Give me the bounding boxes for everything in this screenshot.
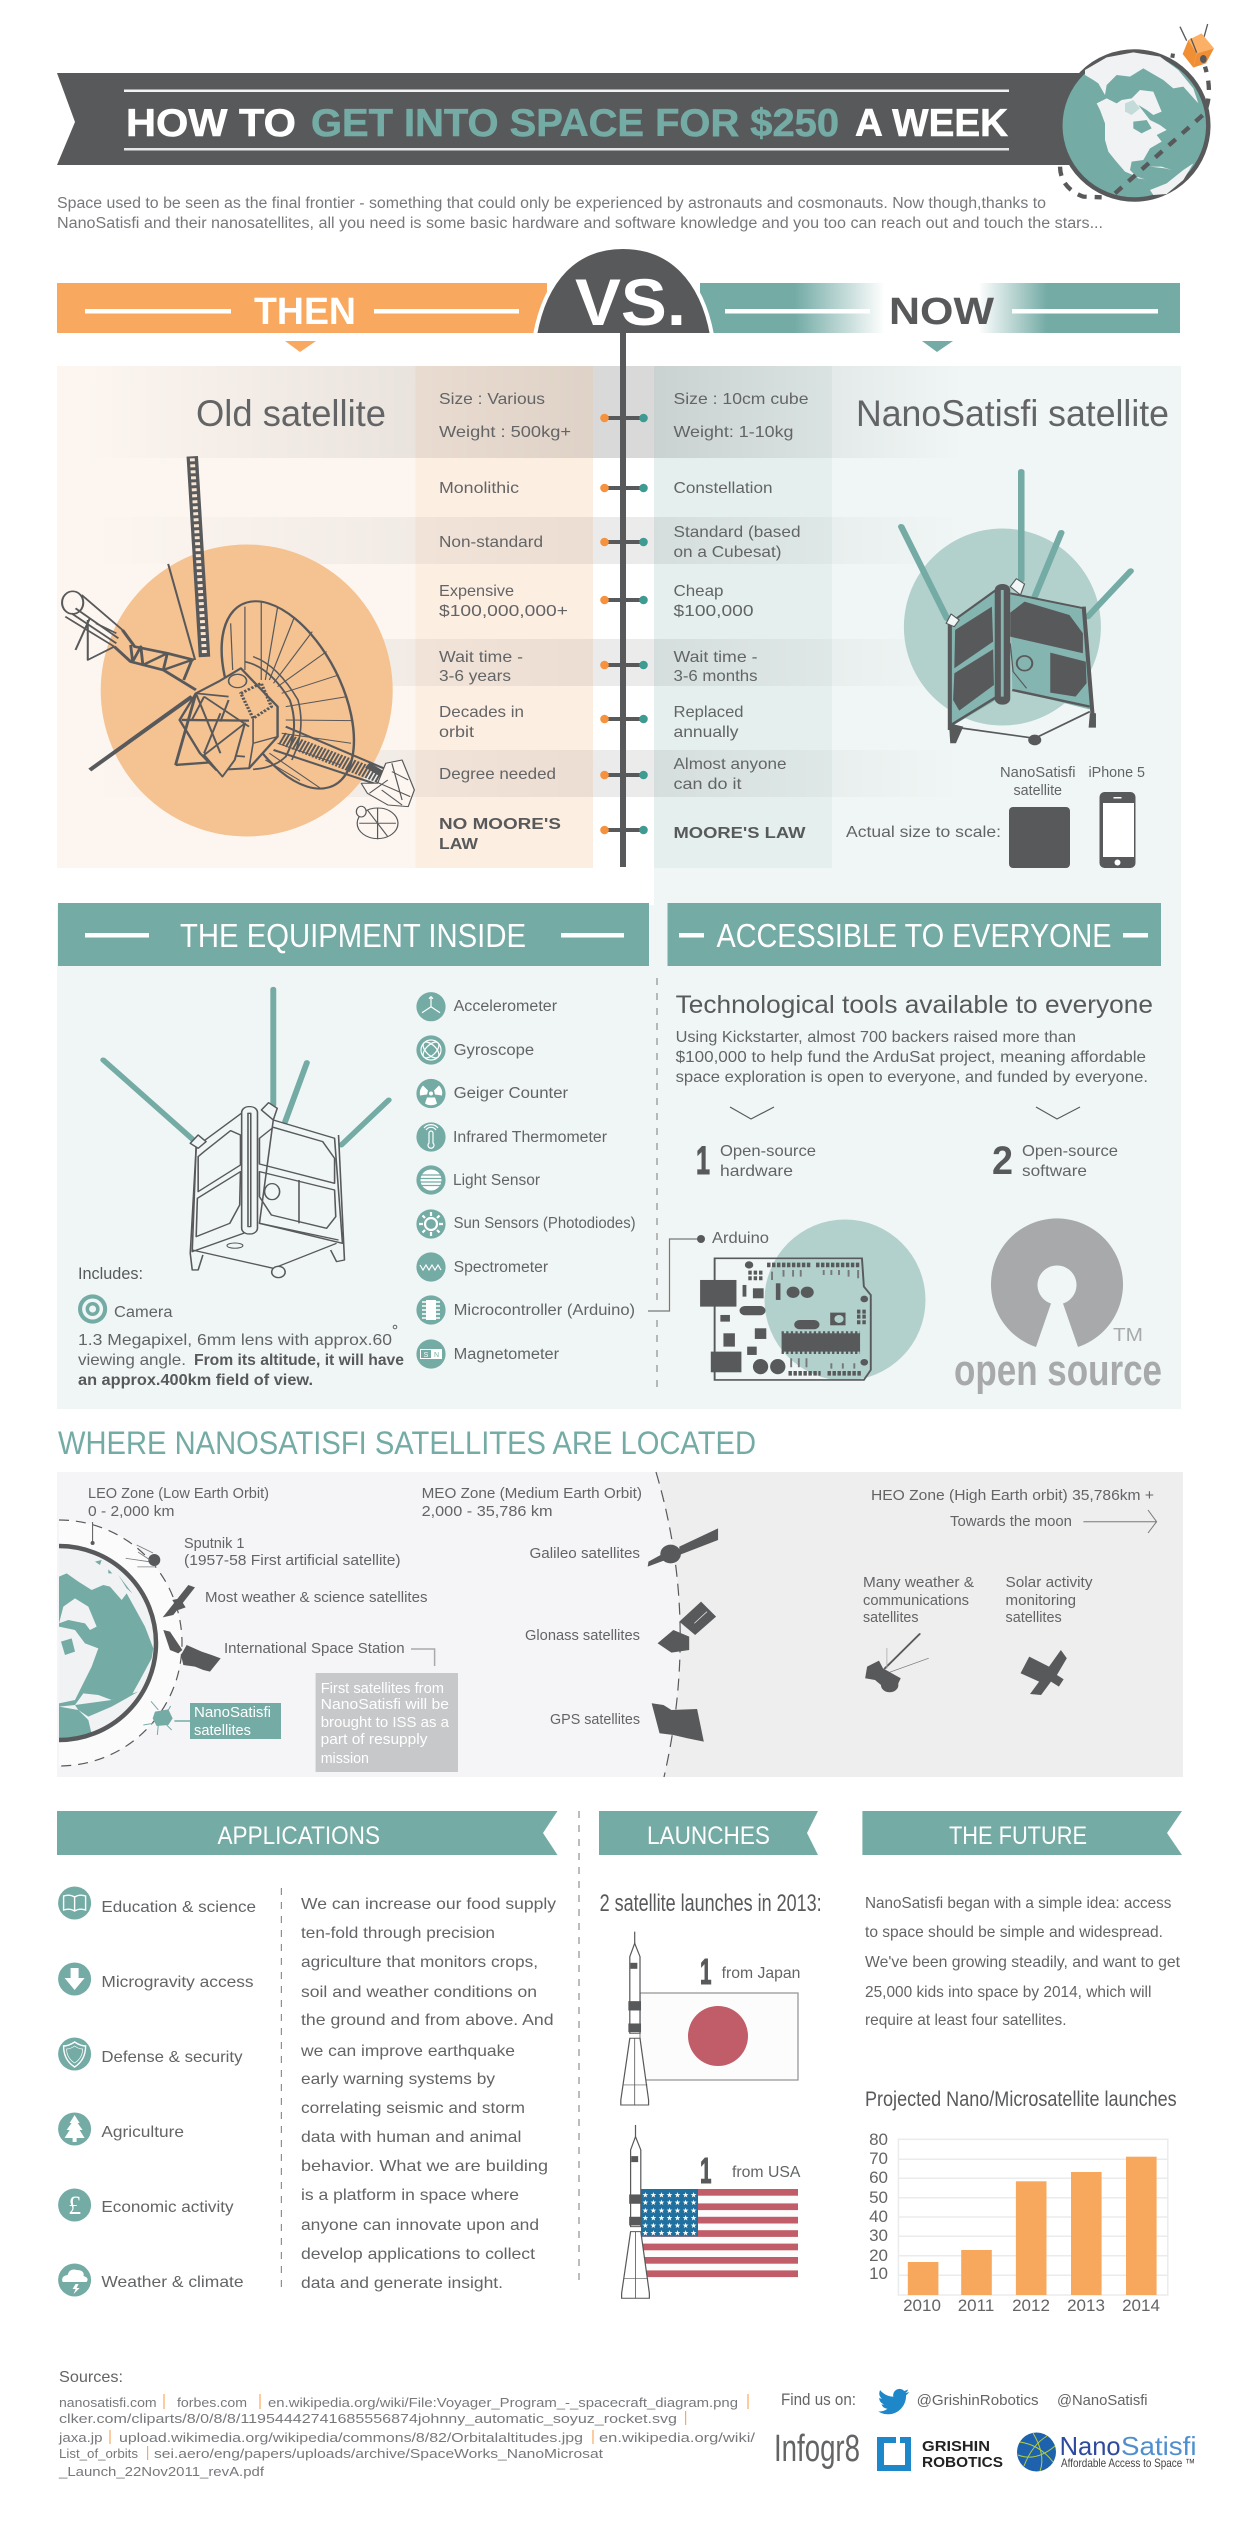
nanosatisfi satellites tag: [143, 1701, 281, 1739]
equipment list: Infrared Thermometer: [453, 1129, 607, 1146]
solar activity satellites: Solar activity: [1006, 1574, 1093, 1591]
icon: infrared thermometer: [416, 1122, 446, 1152]
accessible text block: $100,000 to help fund the ArduSat project, meaning affordable: [676, 1049, 1146, 1066]
panel: orbit zones: [57, 1472, 1183, 1777]
accessible text block: space exploration is open to everyone, and funded by everyone.: [676, 1069, 1148, 1086]
galileo satellites: [530, 1528, 718, 1567]
usa flag: ★★★★★★★: [642, 2190, 697, 2200]
many weather and communications satellites: communications: [863, 1592, 969, 1609]
nanosatisfi satellites tag: NanoSatisfi: [194, 1704, 271, 1721]
nanosatisfi attributes: MOORE'S LAW: [674, 825, 807, 842]
then header bar: [57, 283, 547, 352]
header: accessible to everyone: [668, 903, 1161, 966]
icon: spectrometer: [416, 1252, 446, 1282]
icon: sun sensors: [416, 1209, 446, 1239]
callout: first satellites: First satellites from: [321, 1680, 444, 1697]
bar chart: projected launches: 2012: [1012, 2296, 1050, 2315]
icon: magnetometer: [416, 1339, 446, 1369]
sources: List_of_orbits: [59, 2446, 139, 2461]
equipment list: Geiger Counter: [454, 1085, 568, 1102]
applications paragraph: early warning systems by: [301, 2071, 495, 2088]
international space station: International Space Station: [224, 1640, 405, 1657]
nanosatisfi attributes: Cheap: [674, 583, 724, 600]
bar chart: projected launches: 30: [869, 2226, 888, 2245]
header: accessible to everyone: ACCESSIBLE TO EVERYONE: [716, 917, 1112, 954]
heading: old satellite: Old satellite: [196, 393, 386, 434]
size comparison: Actual size to scale:: [846, 824, 1001, 841]
open-source software label: 2: [992, 1139, 1013, 1183]
logo: grishin robotics: ROBOTICS: [922, 2454, 1003, 2471]
nanosatisfi attributes: 3-6 months: [674, 668, 758, 685]
heading: nanosatisfi satellite: NanoSatisfi satellite: [856, 393, 1169, 434]
future paragraph: [865, 1895, 1181, 2029]
social links: @NanoSatisfi: [1057, 2392, 1148, 2409]
bar chart: projected launches: 80: [869, 2130, 888, 2149]
includes: camera text: [78, 1264, 404, 1389]
future paragraph: 25,000 kids into space by 2014, which will: [865, 1984, 1151, 2001]
bar chart: projected launches: [865, 2088, 1177, 2315]
illustration: arduino board: [700, 1220, 926, 1380]
vs dome: VS.: [575, 265, 686, 339]
open-source hardware label: 1: [696, 1139, 710, 1183]
arduino connector: [648, 1230, 769, 1311]
zone labels: HEO Zone (High Earth orbit) 35,786km +: [871, 1487, 1154, 1504]
applications paragraph: data with human and animal: [301, 2129, 521, 2146]
old satellite attributes: LAW: [439, 836, 479, 853]
open-source hardware label: Open-source: [720, 1143, 816, 1160]
future paragraph: We've been growing steadily, and want to get: [865, 1954, 1181, 1971]
old satellite attributes: Size : Various: [439, 391, 545, 408]
towards the moon arrow: [950, 1510, 1157, 1533]
zone labels: [88, 1485, 1154, 1520]
nanosatisfi satellites tag: satellites: [194, 1722, 251, 1739]
bar chart: projected launches: 20: [869, 2246, 888, 2265]
usa flag: ★★★★★★★: [642, 2228, 697, 2238]
applications paragraph: ten-fold through precision: [301, 1925, 495, 1942]
sputnik: [126, 1535, 401, 1569]
diagram: earth with orbit: [59, 1520, 182, 1766]
sources: upload.wikimedia.org/wikipedia/commons/8/82/Orbitalaltitudes.jpg: [119, 2430, 583, 2445]
icon: gyroscope: [416, 1035, 446, 1065]
icon: camera: [78, 1294, 107, 1324]
panel: now background: [654, 366, 1181, 906]
applications paragraph: anyone can innovate upon and: [301, 2217, 539, 2234]
logo: nanosatisfi: Satisfi: [1121, 2431, 1196, 2461]
nanosatisfi attributes: $100,000: [674, 603, 754, 620]
sputnik: Sputnik 1: [184, 1535, 244, 1552]
includes: camera text: Includes:: [78, 1264, 143, 1283]
equipment list: [416, 992, 636, 1369]
callout: first satellites: NanoSatisfi will be: [321, 1696, 449, 1713]
size comparison: iPhone 5: [1088, 765, 1145, 781]
future paragraph: NanoSatisfi began with a simple idea: access: [865, 1895, 1171, 1912]
accessible text block: Technological tools available to everyone: [676, 991, 1153, 1019]
future paragraph: require at least four satellites.: [865, 2012, 1066, 2029]
glonass satellites: Glonass satellites: [525, 1627, 640, 1644]
icon: rocket usa: [622, 2125, 649, 2298]
intro text: [57, 195, 1103, 232]
japan flag: from Japan: [722, 1965, 800, 1982]
solar activity satellites: [1006, 1574, 1093, 1695]
icon: globe with orbiting satellite: [1060, 24, 1214, 199]
vs dome: [535, 247, 712, 339]
icon: open source logo: open source: [954, 1346, 1162, 1395]
old satellite attributes: Weight : 500kg+: [439, 424, 571, 441]
social links: Find us on:: [781, 2390, 856, 2409]
applications paragraph: [300, 1896, 556, 2292]
nanosatisfi attributes: Standard (based: [674, 524, 800, 541]
old satellite attributes: $100,000,000+: [439, 603, 568, 620]
comparison row bands: [57, 366, 964, 797]
nanosatisfi attributes: Weight: 1-10kg: [674, 424, 794, 441]
old satellite attributes: [439, 391, 571, 853]
applications paragraph: behavior. What we are building: [301, 2158, 548, 2175]
intro text: NanoSatisfi and their nanosatellites, all you need is some basic hardware and software knowledge and you too can reach out and touch the stars...: [57, 215, 1103, 232]
icon: twitter bird: [878, 2389, 909, 2414]
nanosatisfi attributes: can do it: [674, 776, 742, 793]
old satellite attributes: Non-standard: [439, 534, 543, 551]
sources: jaxa.jp: [58, 2430, 102, 2445]
sources: en.wikipedia.org/wiki/File:Voyager_Program_-_spacecraft_diagram.png: [268, 2395, 738, 2410]
sources: nanosatisfi.com: [59, 2395, 157, 2410]
accessible text block: Using Kickstarter, almost 700 backers raised more than: [676, 1029, 1076, 1046]
towards the moon arrow: Towards the moon: [950, 1513, 1072, 1530]
header: the future: [862, 1811, 1182, 1855]
usa flag: 1: [700, 2150, 712, 2191]
bar chart: projected launches: 70: [869, 2149, 888, 2168]
gps satellites: GPS satellites: [550, 1711, 640, 1728]
applications list: Weather & climate: [101, 2274, 244, 2291]
usa flag: [641, 2150, 801, 2277]
comparison timeline: [600, 333, 648, 867]
icon: magnetometer: N: [434, 1352, 439, 1359]
sources: sei.aero/eng/papers/uploads/archive/SpaceWorks_NanoMicrosat: [154, 2446, 603, 2461]
old satellite attributes: orbit: [439, 724, 475, 741]
intro text: Space used to be seen as the final frontier - something that could only be experienced by astronauts and cosmonauts. Now though,thanks to: [57, 195, 1046, 212]
nanosatisfi attributes: [674, 391, 809, 842]
header: applications: APPLICATIONS: [218, 1822, 380, 1850]
old satellite attributes: Expensive: [439, 583, 514, 600]
open-source software label: Open-source: [1022, 1143, 1118, 1160]
nanosatisfi attributes: annually: [674, 724, 738, 741]
logo: nanosatisfi: [1017, 2431, 1196, 2472]
icon: geiger counter: [416, 1079, 446, 1108]
size comparison: [846, 765, 1145, 868]
size comparison: satellite: [1014, 783, 1062, 799]
galileo satellites: Galileo satellites: [530, 1545, 640, 1562]
callout: first satellites: [316, 1673, 458, 1772]
many weather and communications satellites: Many weather &: [863, 1574, 974, 1591]
icon: accelerometer: [416, 992, 446, 1021]
heading: where satellites are located: WHERE NANOSATISFI SATELLITES ARE LOCATED: [58, 1425, 756, 1461]
future paragraph: to space should be simple and widespread.: [865, 1924, 1163, 1941]
applications paragraph: the ground and from above. And: [301, 2012, 554, 2029]
now header bar: [700, 283, 1180, 352]
old satellite attributes: Wait time -: [439, 649, 523, 666]
icon: pound sign: £: [68, 2191, 81, 2220]
launches heading: 2 satellite launches in 2013:: [600, 1890, 822, 1917]
callout: first satellites: brought to ISS as a: [321, 1714, 450, 1731]
japan flag: [640, 1951, 800, 2080]
japan flag: 1: [700, 1951, 712, 1992]
nanosatisfi attributes: Size : 10cm cube: [674, 391, 809, 408]
sources: forbes.com: [177, 2395, 247, 2410]
title banner: [57, 73, 1080, 165]
applications paragraph: develop applications to collect: [301, 2246, 536, 2263]
bar chart: projected launches: 2013: [1067, 2296, 1105, 2315]
illustration: voyager old satellite: [62, 456, 414, 839]
bar chart: projected launches: Projected Nano/Microsatellite launches: [865, 2088, 1177, 2111]
equipment list: Sun Sensors (Photodiodes): [454, 1215, 636, 1232]
applications list: Agriculture: [101, 2124, 184, 2141]
header: the future: THE FUTURE: [949, 1822, 1087, 1850]
zone labels: MEO Zone (Medium Earth Orbit): [422, 1485, 642, 1502]
logo: grishin robotics: [877, 2437, 1003, 2471]
logo: grishin robotics: GRISHIN: [922, 2438, 990, 2455]
includes: camera text: 1.3 Megapixel, 6mm lens with approx.60: [78, 1332, 392, 1349]
weather and science satellites: [163, 1585, 428, 1617]
nanosatisfi attributes: on a Cubesat): [674, 544, 782, 561]
then header bar: THEN: [254, 291, 356, 333]
panel: section background: [57, 905, 1181, 1409]
bar chart: projected launches: 2014: [1122, 2296, 1160, 2315]
nanosatisfi attributes: Constellation: [674, 480, 772, 497]
icon: light sensor: [416, 1165, 446, 1195]
icon: storm cloud: [58, 2264, 91, 2296]
icon: open source logo: TM: [1113, 1325, 1143, 1345]
logo: nanosatisfi: Affordable Access to Space ™: [1061, 2456, 1195, 2470]
icon: magnetometer: S: [424, 1352, 429, 1359]
applications paragraph: We can increase our food supply: [301, 1896, 556, 1913]
callout: first satellites: part of resupply: [321, 1731, 428, 1748]
arduino connector: Arduino: [712, 1230, 769, 1247]
international space station: [163, 1630, 435, 1672]
applications paragraph: agriculture that monitors crops,: [301, 1954, 538, 1971]
old satellite attributes: Decades in: [439, 704, 524, 721]
icon: open source logo: [954, 1218, 1162, 1395]
old satellite attributes: 3-6 years: [439, 668, 511, 685]
equipment list: Light Sensor: [453, 1172, 540, 1189]
bar chart: projected launches: 50: [869, 2188, 888, 2207]
applications paragraph: soil and weather conditions on: [301, 1984, 537, 2001]
open-source hardware label: hardware: [720, 1163, 793, 1180]
usa flag: ★★★★★★★: [642, 2221, 697, 2230]
solar activity satellites: satellites: [1006, 1609, 1062, 1626]
solar activity satellites: monitoring: [1006, 1592, 1076, 1609]
sources: en.wikipedia.org/wiki/: [599, 2430, 755, 2445]
size comparison: NanoSatisfi: [1000, 765, 1076, 781]
icon: down arrow: [58, 1962, 91, 1996]
sputnik: (1957-58 First artificial satellite): [184, 1552, 401, 1569]
includes: camera text: From its altitude, it will have: [194, 1352, 404, 1369]
equipment list: Gyroscope: [454, 1042, 534, 1059]
applications paragraph: we can improve earthquake: [300, 2043, 515, 2060]
open-source software label: software: [1022, 1163, 1087, 1180]
icon: shield: [58, 2038, 91, 2070]
social links: [781, 2389, 1148, 2414]
applications list: Microgravity access: [101, 1974, 254, 1991]
equipment list: Magnetometer: [454, 1346, 559, 1363]
open-source hardware label: [696, 1107, 816, 1183]
header: launches: LAUNCHES: [647, 1822, 770, 1850]
applications paragraph: correlating seismic and storm: [301, 2100, 525, 2117]
sources: [58, 2369, 755, 2479]
equipment list: Microcontroller (Arduino): [454, 1302, 635, 1319]
old satellite attributes: Monolithic: [439, 480, 519, 497]
logo: infogr8: Infogr8: [774, 2428, 860, 2470]
old satellite attributes: Degree needed: [439, 766, 556, 783]
nanosatisfi attributes: Wait time -: [674, 649, 758, 666]
nanosatisfi attributes: Almost anyone: [674, 756, 787, 773]
bar chart: projected launches: 60: [869, 2168, 888, 2187]
bar chart: projected launches: 2011: [958, 2296, 994, 2315]
sources: _Launch_22Nov2011_revA.pdf: [58, 2464, 264, 2479]
sources: clker.com/cliparts/8/0/8/8/11954442741685556874johnny_automatic_soyuz_rocket.svg: [59, 2411, 677, 2426]
equipment list: Accelerometer: [454, 998, 557, 1015]
icon: book: [58, 1886, 91, 1920]
zone labels: 2,000 - 35,786 km: [422, 1503, 553, 1520]
icon: rocket japan: [621, 1932, 649, 2105]
applications list: Education & science: [101, 1899, 256, 1916]
callout: first satellites: mission: [321, 1750, 369, 1767]
header: launches: [599, 1811, 818, 1855]
weather and science satellites: Most weather & science satellites: [205, 1589, 428, 1606]
usa flag: ★★★★★★★: [642, 2214, 697, 2222]
old satellite attributes: NO MOORE'S: [439, 816, 561, 833]
gps satellites: [550, 1703, 704, 1742]
glonass satellites: [525, 1602, 716, 1653]
logo: nanosatisfi: Nano: [1060, 2431, 1121, 2461]
many weather and communications satellites: [863, 1574, 974, 1692]
header: the equipment inside: [58, 903, 649, 966]
icon: microcontroller: [416, 1295, 446, 1325]
applications paragraph: is a platform in space where: [301, 2187, 519, 2204]
social links: @GrishinRobotics: [917, 2392, 1039, 2409]
usa flag: from USA: [732, 2164, 801, 2181]
accessible text block: [676, 991, 1153, 1086]
zone labels: 0 - 2,000 km: [88, 1503, 174, 1520]
now header bar: NOW: [889, 291, 994, 333]
applications list: Defense & security: [101, 2049, 243, 2066]
zone labels: LEO Zone (Low Earth Orbit): [88, 1485, 269, 1502]
icon: pound sign: [58, 2188, 91, 2222]
bar chart: projected launches: 2010: [903, 2296, 941, 2315]
includes: camera text: Camera: [114, 1304, 173, 1321]
applications list: Economic activity: [101, 2199, 234, 2216]
title banner: A WEEK: [855, 102, 1008, 145]
nanosatisfi attributes: Replaced: [674, 704, 744, 721]
applications list: [58, 1886, 256, 2296]
open-source software label: [992, 1107, 1118, 1183]
includes: camera text: viewing angle.: [78, 1352, 186, 1369]
sources: Sources:: [59, 2369, 123, 2386]
equipment list: Spectrometer: [454, 1259, 548, 1276]
usa flag: ★★★★★★★: [642, 2206, 697, 2215]
header: applications: [57, 1811, 558, 1855]
bar chart: projected launches: 40: [869, 2207, 888, 2226]
panel: then background: [57, 366, 593, 868]
bar chart: projected launches: 10: [869, 2264, 888, 2283]
title banner: HOW TO: [126, 102, 296, 145]
illustration: nanosatisfi cubesat: [901, 472, 1131, 745]
title banner: GET INTO SPACE FOR $250: [311, 102, 839, 145]
many weather and communications satellites: satellites: [863, 1609, 918, 1626]
includes: camera text: an approx.400km field of view.: [78, 1372, 313, 1389]
header: the equipment inside: THE EQUIPMENT INSIDE: [180, 917, 526, 954]
illustration: cubesat line drawing: [103, 989, 389, 1278]
applications paragraph: data and generate insight.: [301, 2275, 503, 2292]
usa flag: ★★★★★★★: [642, 2198, 697, 2207]
icon: tree: [58, 2112, 91, 2146]
